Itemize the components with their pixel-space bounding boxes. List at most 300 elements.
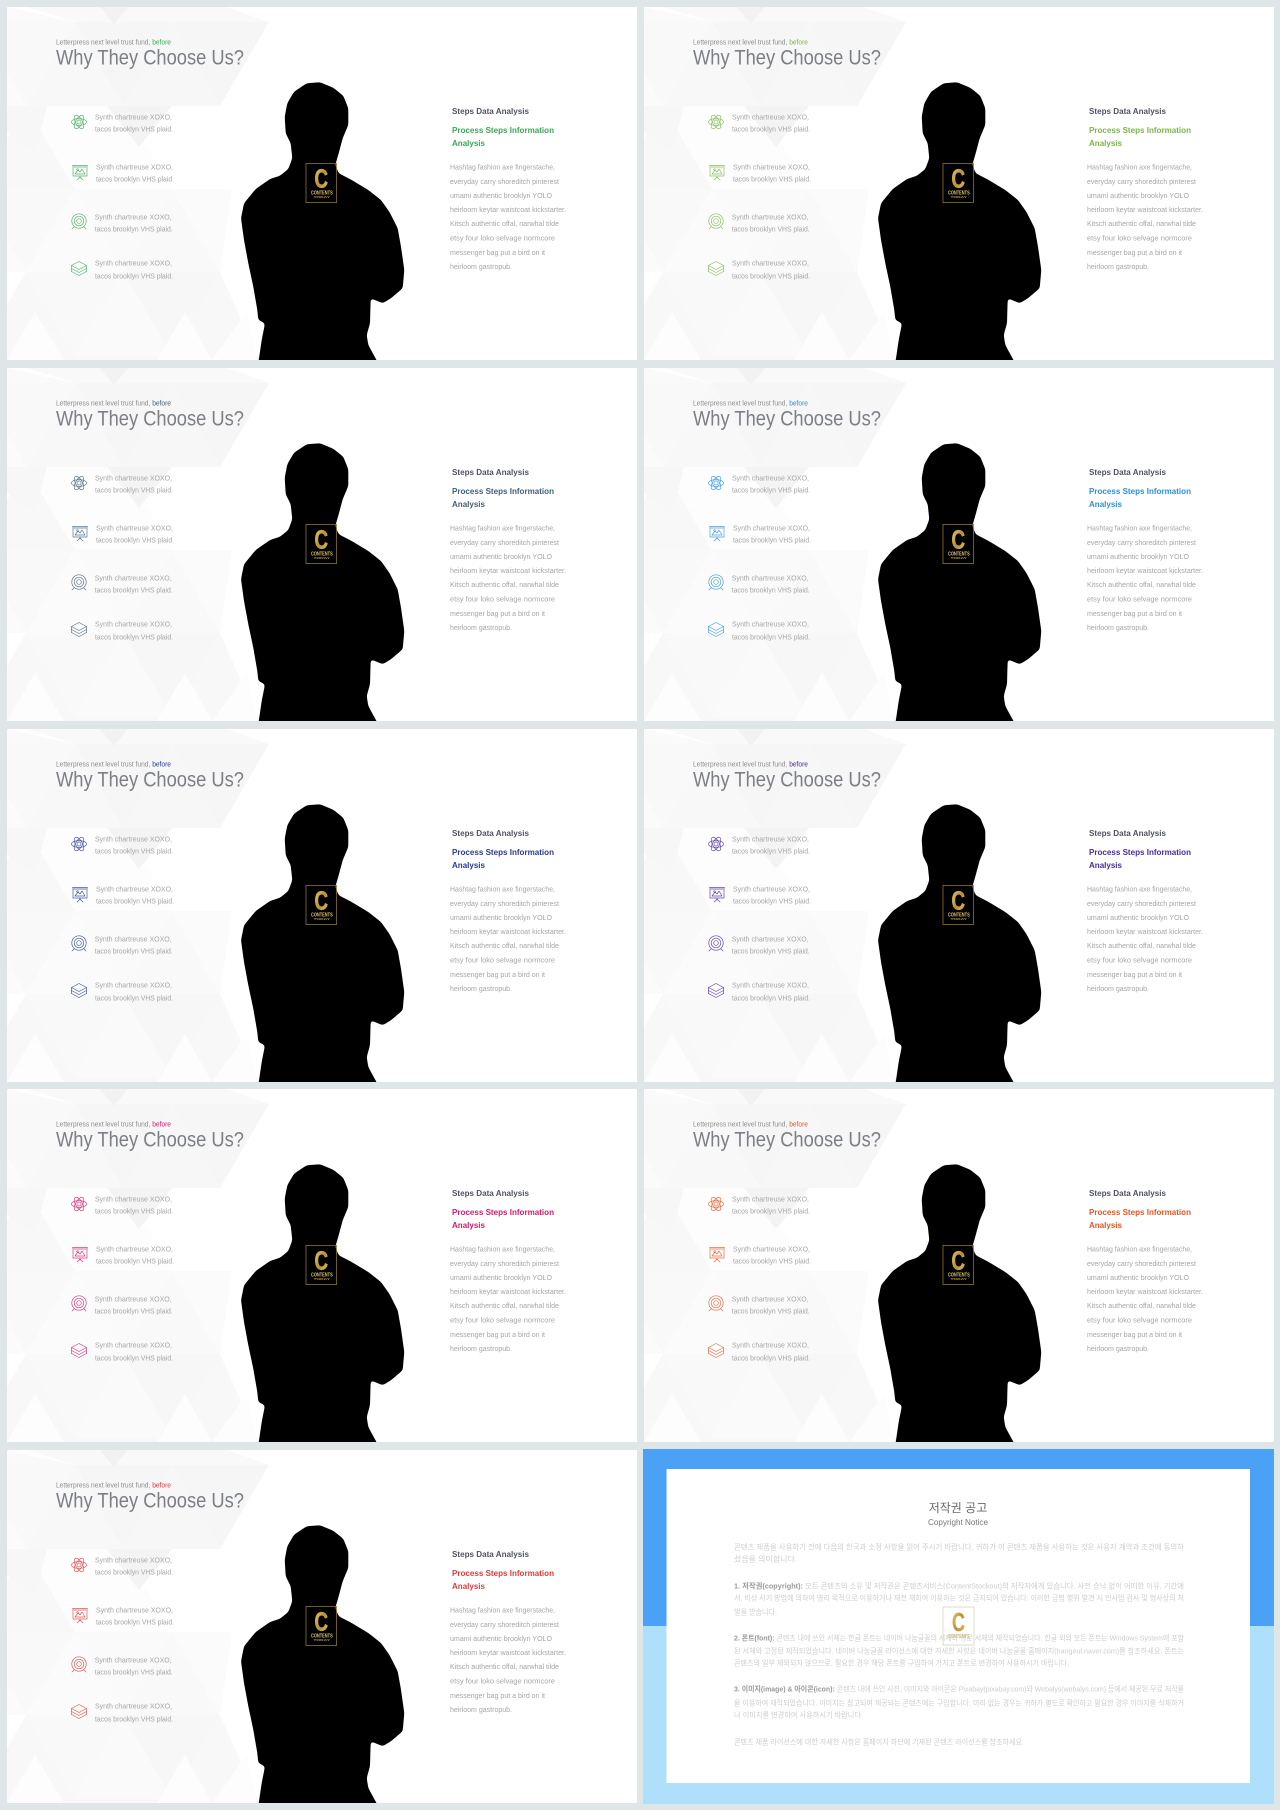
- right accent heading: [452, 1208, 554, 1230]
- right accent heading: Process Steps Information: [452, 487, 554, 496]
- logo badge: CONTENTS: [311, 912, 333, 918]
- icon: atom: [708, 836, 724, 852]
- list item 1: Synth chartreuse XOXO,: [95, 836, 172, 844]
- list item 4: Synth chartreuse XOXO,: [732, 982, 809, 990]
- title: Why They Choose Us?: [56, 768, 244, 792]
- background triangle pattern: [566, 7, 944, 360]
- list item 1: [95, 1196, 173, 1216]
- right paragraph: umami authentic brooklyn YOLO: [1087, 193, 1190, 200]
- list item 4: tacos brooklyn VHS plaid.: [95, 1356, 173, 1362]
- list item 4: [95, 1704, 173, 1724]
- right paragraph: everyday carry shoreditch pinterest: [1087, 901, 1196, 908]
- list item 4: tacos brooklyn VHS plaid.: [732, 1356, 810, 1362]
- logo badge: C: [952, 525, 965, 555]
- icon: presentation board: [710, 1248, 724, 1262]
- list item 3: [95, 1296, 173, 1316]
- icon: presentation board: [72, 1248, 88, 1262]
- title: Why They Choose Us?: [56, 408, 244, 430]
- right accent heading: Analysis: [452, 1582, 486, 1591]
- icon: atom: [72, 475, 86, 491]
- icon: layers: [708, 984, 724, 998]
- silhouette of man: [878, 1164, 1041, 1454]
- right paragraph: Kitsch authentic offal, narwhal tilde: [1087, 582, 1196, 589]
- right paragraph: heirloom gastropub.: [450, 1346, 512, 1353]
- silhouette of man: [241, 443, 404, 733]
- right accent heading: Process Steps Information: [452, 848, 554, 857]
- silhouette of man: [241, 1525, 404, 1810]
- notice section 2: 2. 폰트(font): 콘텐츠 내에 쓰인 서체는 한글 폰트는 네이버 나눔글꼴의 서체와 영문 서체의 제작되었습니다. 한글 외의 모든 폰트는 Windows System에 포함: [734, 1632, 1184, 1642]
- list item 3: tacos brooklyn VHS plaid.: [732, 226, 810, 234]
- right paragraph: Hashtag fashion axe fingerstache,: [450, 1608, 555, 1614]
- icon: layers: [72, 622, 86, 636]
- panel: copyright notice: [643, 1449, 1274, 1804]
- list item 2: Synth chartreuse XOXO,: [96, 886, 173, 894]
- list item 1: tacos brooklyn VHS plaid.: [95, 126, 173, 134]
- right accent heading: Analysis: [452, 500, 486, 509]
- logo badge: CONTENTS: [311, 1272, 333, 1278]
- right accent heading: Process Steps Information: [1089, 126, 1191, 135]
- logo badge: C: [952, 1246, 965, 1276]
- list item 3: tacos brooklyn VHS plaid.: [95, 588, 173, 594]
- list item 4: [732, 982, 810, 1002]
- list item 2: [96, 886, 174, 906]
- right paragraph: etsy four loko selvage normcore: [1087, 1318, 1192, 1324]
- panel: slide 7 magenta: [7, 1089, 637, 1442]
- icon: target: [72, 214, 86, 229]
- notice section 1: 1. 저작권(copyright): 모든 콘텐츠의 소유 및 저작권은 콘텐츠서비스(ContentStockout)의 저작자에게 있습니다. 사전 승낙 없이 어떠한 이유, 기간에: [734, 1580, 1184, 1590]
- list item 1: Synth chartreuse XOXO,: [95, 114, 172, 122]
- list item 3: Synth chartreuse XOXO,: [732, 936, 809, 944]
- notice title: 저작권 공고: [929, 1501, 987, 1515]
- right paragraph: umami authentic brooklyn YOLO: [450, 1636, 553, 1643]
- icon: presentation board: [72, 1608, 88, 1623]
- list item 4: tacos brooklyn VHS plaid.: [95, 634, 173, 642]
- icon: layers: [72, 262, 86, 276]
- right paragraph: heirloom keytar waistcoat kickstarter.: [1087, 1289, 1203, 1296]
- notice intro: 콘텐츠 제품을 사용하기 전에 다음의 한국과 소정 사항을 읽어 주시기 바랍니다. 귀하가 이 콘텐츠 제품을 사용하는 것은 사용자 계약과 조건에 동의하: [734, 1542, 1184, 1552]
- list item 2: tacos brooklyn VHS plaid.: [96, 1258, 174, 1266]
- right paragraph: umami authentic brooklyn YOLO: [1087, 915, 1190, 922]
- subtitle: Letterpress next level trust fund, before: [693, 400, 808, 408]
- logo badge: CONTENTS: [311, 551, 333, 557]
- subtitle: Letterpress next level trust fund, before: [693, 762, 808, 768]
- right paragraph: heirloom keytar waistcoat kickstarter.: [1087, 568, 1203, 575]
- right paragraph: Kitsch authentic offal, narwhal tilde: [1087, 221, 1196, 228]
- list item 1: [95, 114, 173, 134]
- subtitle: Letterpress next level trust fund, before: [56, 40, 171, 46]
- right paragraph: heirloom gastropub.: [1087, 1346, 1149, 1353]
- right accent heading: [452, 487, 554, 509]
- title: Why They Choose Us?: [56, 1490, 244, 1512]
- list item 4: Synth chartreuse XOXO,: [95, 1342, 172, 1350]
- background triangle pattern: [566, 1089, 944, 1442]
- list item 3: Synth chartreuse XOXO,: [732, 214, 809, 222]
- list item 2: [733, 164, 811, 184]
- list item 4: Synth chartreuse XOXO,: [732, 1342, 809, 1350]
- logo badge: [943, 524, 974, 564]
- list item 3: Synth chartreuse XOXO,: [95, 936, 172, 944]
- right accent heading: [1089, 848, 1191, 870]
- list item 4: [732, 622, 810, 642]
- right paragraph: umami authentic brooklyn YOLO: [450, 554, 553, 561]
- right accent heading: Process Steps Information: [452, 126, 554, 135]
- list item 3: tacos brooklyn VHS plaid.: [95, 1308, 173, 1316]
- right accent heading: Analysis: [452, 1221, 486, 1230]
- icon: target: [72, 936, 86, 951]
- background triangle pattern: [0, 368, 307, 721]
- logo badge: CONTENTS: [311, 190, 333, 196]
- right paragraph: [450, 164, 566, 271]
- right accent heading: Analysis: [1089, 861, 1123, 870]
- background triangle pattern: [566, 368, 944, 721]
- right paragraph: heirloom gastropub.: [450, 625, 512, 632]
- icon: atom: [72, 1557, 86, 1573]
- silhouette of man: [241, 1164, 404, 1454]
- icon: presentation board: [710, 166, 724, 180]
- icon: target: [72, 1296, 86, 1311]
- list item 2: Synth chartreuse XOXO,: [96, 526, 173, 532]
- right paragraph: Kitsch authentic offal, narwhal tilde: [450, 1303, 559, 1310]
- right paragraph: everyday carry shoreditch pinterest: [1087, 179, 1196, 186]
- title: Why They Choose Us?: [693, 768, 881, 792]
- list item 2: tacos brooklyn VHS plaid.: [733, 1258, 811, 1266]
- icon: atom: [708, 1196, 724, 1212]
- list item 3: [732, 1296, 810, 1316]
- right paragraph: heirloom gastropub.: [450, 1707, 512, 1714]
- right accent heading: Process Steps Information: [1089, 487, 1191, 496]
- icon: atom: [708, 114, 724, 130]
- list item 1: tacos brooklyn VHS plaid.: [732, 488, 810, 494]
- logo badge: C: [314, 1607, 328, 1637]
- icon: target: [709, 575, 723, 590]
- list item 3: [95, 576, 173, 594]
- list item 4: tacos brooklyn VHS plaid.: [95, 274, 173, 280]
- subtitle: Letterpress next level trust fund, before: [56, 1122, 171, 1128]
- right paragraph: Kitsch authentic offal, narwhal tilde: [1087, 1303, 1196, 1310]
- list item 1: tacos brooklyn VHS plaid.: [95, 1208, 173, 1216]
- right paragraph: heirloom gastropub.: [1087, 625, 1149, 632]
- list item 3: tacos brooklyn VHS plaid.: [732, 588, 810, 594]
- right accent heading: Analysis: [452, 861, 486, 870]
- list item 2: tacos brooklyn VHS plaid.: [96, 176, 174, 184]
- subtitle: Letterpress next level trust fund, before: [56, 400, 171, 408]
- right paragraph: messenger bag put a bird on it: [450, 972, 545, 979]
- list item 3: [732, 936, 810, 956]
- right paragraph: messenger bag put a bird on it: [1087, 1332, 1182, 1339]
- white notice card: [666, 1469, 1250, 1783]
- list item 3: [732, 214, 810, 234]
- blue upper band: [643, 1449, 1274, 1626]
- right accent heading: Analysis: [1089, 1221, 1123, 1230]
- list item 1: tacos brooklyn VHS plaid.: [95, 1570, 173, 1576]
- right heading: Steps Data Analysis: [452, 829, 530, 838]
- right paragraph: everyday carry shoreditch pinterest: [1087, 1261, 1196, 1268]
- list item 1: tacos brooklyn VHS plaid.: [95, 488, 173, 494]
- right paragraph: heirloom keytar waistcoat kickstarter.: [1087, 207, 1203, 214]
- logo badge: [943, 886, 974, 924]
- logo badge faded: [943, 1607, 974, 1645]
- list item 1: Synth chartreuse XOXO,: [732, 1196, 809, 1204]
- right paragraph: Hashtag fashion axe fingerstache,: [1087, 1246, 1192, 1254]
- list item 4: tacos brooklyn VHS plaid.: [732, 634, 810, 642]
- right heading: Steps Data Analysis: [1089, 107, 1167, 116]
- list item 2: tacos brooklyn VHS plaid.: [733, 176, 811, 184]
- right paragraph: [1087, 164, 1203, 271]
- subtitle: Letterpress next level trust fund, before: [56, 1482, 171, 1490]
- list item 3: tacos brooklyn VHS plaid.: [95, 948, 173, 956]
- list item 2: Synth chartreuse XOXO,: [733, 164, 810, 172]
- list item 1: [95, 836, 173, 856]
- logo badge: TODAY: [950, 917, 967, 921]
- icon: atom: [72, 114, 86, 130]
- title: Why They Choose Us?: [56, 46, 244, 70]
- list item 2: tacos brooklyn VHS plaid.: [96, 898, 174, 906]
- logo badge: [943, 1246, 974, 1284]
- icon: target: [709, 936, 723, 951]
- right paragraph: etsy four loko selvage normcore: [450, 1318, 555, 1324]
- right paragraph: Hashtag fashion axe fingerstache,: [1087, 526, 1192, 532]
- subtitle: Letterpress next level trust fund, before: [56, 762, 171, 768]
- list item 2: tacos brooklyn VHS plaid.: [96, 538, 174, 544]
- right accent heading: Process Steps Information: [452, 1208, 554, 1217]
- logo badge: TODAY: [314, 917, 330, 921]
- right paragraph: umami authentic brooklyn YOLO: [450, 193, 553, 200]
- right paragraph: messenger bag put a bird on it: [1087, 611, 1182, 618]
- right paragraph: etsy four loko selvage normcore: [1087, 596, 1192, 604]
- right paragraph: Kitsch authentic offal, narwhal tilde: [450, 221, 559, 228]
- right accent heading: Analysis: [1089, 500, 1123, 509]
- right paragraph: Hashtag fashion axe fingerstache,: [450, 1246, 555, 1254]
- list item 2: [733, 886, 811, 906]
- right heading: Steps Data Analysis: [1089, 1189, 1167, 1198]
- list item 4: tacos brooklyn VHS plaid.: [732, 274, 810, 280]
- icon: atom: [72, 836, 86, 852]
- right paragraph: Kitsch authentic offal, narwhal tilde: [450, 1664, 559, 1671]
- logo badge: CONTENTS: [948, 551, 970, 557]
- right heading: Steps Data Analysis: [452, 1189, 530, 1198]
- notice section 3: 을 이용하여 제작되었습니다. 이미지는 참고되며 제공되는 콘텐츠에는 구입합니다. 미리 없는 경우는 귀하가 별도로 확인하고 필요한 경우 이미지를 삭제하거: [734, 1698, 1184, 1708]
- right paragraph: Hashtag fashion axe fingerstache,: [450, 164, 555, 172]
- icon: presentation board: [710, 888, 724, 902]
- icon: target: [72, 1657, 86, 1672]
- list item 1: tacos brooklyn VHS plaid.: [95, 848, 173, 856]
- right paragraph: etsy four loko selvage normcore: [450, 958, 555, 964]
- right paragraph: Kitsch authentic offal, narwhal tilde: [1087, 943, 1196, 950]
- silhouette of man: [878, 443, 1041, 733]
- list item 1: [732, 476, 810, 494]
- icon: layers: [708, 262, 724, 276]
- list item 2: Synth chartreuse XOXO,: [733, 886, 810, 894]
- right paragraph: Kitsch authentic offal, narwhal tilde: [450, 582, 559, 589]
- icon: layers: [72, 1704, 86, 1718]
- right paragraph: [450, 886, 566, 993]
- list item 3: [95, 214, 173, 234]
- right paragraph: everyday carry shoreditch pinterest: [450, 1261, 559, 1268]
- notice section 3: [734, 1684, 1184, 1720]
- list item 2: tacos brooklyn VHS plaid.: [733, 538, 811, 544]
- right heading: Steps Data Analysis: [1089, 468, 1167, 477]
- icon: layers: [72, 1344, 86, 1358]
- right accent heading: [452, 1569, 554, 1591]
- title: Why They Choose Us?: [693, 408, 881, 430]
- icon: target: [72, 575, 86, 590]
- logo badge: C: [314, 525, 328, 555]
- notice section 2: [734, 1632, 1184, 1668]
- right paragraph: messenger bag put a bird on it: [1087, 250, 1182, 257]
- right paragraph: messenger bag put a bird on it: [450, 611, 545, 618]
- right accent heading: Analysis: [452, 139, 486, 148]
- right accent heading: Process Steps Information: [452, 1569, 554, 1578]
- icon: presentation board: [710, 526, 724, 541]
- right paragraph: everyday carry shoreditch pinterest: [1087, 540, 1196, 547]
- list item 2: Synth chartreuse XOXO,: [96, 1608, 173, 1614]
- panel: slide 1 green: [7, 7, 637, 360]
- icon: atom: [72, 1196, 86, 1212]
- list item 3: tacos brooklyn VHS plaid.: [732, 1308, 810, 1316]
- panel: slide 6 purple: [644, 729, 1274, 1082]
- logo badge: TODAY: [950, 1277, 967, 1281]
- logo badge: C: [952, 164, 965, 194]
- right paragraph: [450, 526, 566, 632]
- right paragraph: everyday carry shoreditch pinterest: [450, 179, 559, 186]
- right paragraph: umami authentic brooklyn YOLO: [1087, 554, 1190, 561]
- right paragraph: etsy four loko selvage normcore: [450, 596, 555, 604]
- logo badge: CONTENTS: [948, 1272, 970, 1278]
- silhouette of man: [241, 82, 404, 372]
- right accent heading: [452, 126, 554, 148]
- right paragraph: Hashtag fashion axe fingerstache,: [1087, 164, 1192, 172]
- list item 3: tacos brooklyn VHS plaid.: [95, 226, 173, 234]
- right paragraph: messenger bag put a bird on it: [450, 250, 545, 257]
- list item 1: [732, 114, 810, 134]
- list item 1: Synth chartreuse XOXO,: [95, 1558, 172, 1564]
- list item 2: [96, 1608, 174, 1626]
- right paragraph: heirloom keytar waistcoat kickstarter.: [450, 207, 566, 214]
- right paragraph: everyday carry shoreditch pinterest: [450, 1622, 559, 1629]
- notice section 2: 된 서체와 고정된 제작되었습니다. 네이버 나눔글꼴 라이선스에 대한 자세한 사항은 네이버 나눔글꼴 홈페이지(hangeul.naver.com)를 참조하세요. 폰트는: [734, 1646, 1184, 1656]
- title: Why They Choose Us?: [56, 1128, 244, 1152]
- right paragraph: heirloom keytar waistcoat kickstarter.: [450, 1650, 566, 1657]
- right paragraph: Hashtag fashion axe fingerstache,: [1087, 886, 1192, 894]
- icon: presentation board: [72, 526, 88, 541]
- logo badge: [306, 524, 336, 564]
- list item 4: [95, 622, 173, 642]
- right accent heading: Process Steps Information: [1089, 1208, 1191, 1217]
- list item 3: tacos brooklyn VHS plaid.: [732, 948, 810, 956]
- icon: target: [709, 214, 723, 229]
- right paragraph: everyday carry shoreditch pinterest: [450, 901, 559, 908]
- list item 3: Synth chartreuse XOXO,: [732, 1296, 809, 1304]
- list item 4: Synth chartreuse XOXO,: [95, 982, 172, 990]
- list item 2: Synth chartreuse XOXO,: [733, 526, 810, 532]
- logo badge: C: [314, 164, 328, 194]
- list item 2: [733, 526, 811, 544]
- right accent heading: Analysis: [1089, 139, 1123, 148]
- right paragraph: etsy four loko selvage normcore: [1087, 236, 1192, 242]
- right paragraph: umami authentic brooklyn YOLO: [450, 1275, 553, 1282]
- list item 3: Synth chartreuse XOXO,: [95, 1658, 172, 1664]
- logo badge: TODAY: [314, 195, 330, 199]
- right paragraph: etsy four loko selvage normcore: [1087, 958, 1192, 964]
- notice subtitle: Copyright Notice: [928, 1518, 989, 1527]
- panel: slide 3 slate: [7, 368, 637, 721]
- list item 2: Synth chartreuse XOXO,: [96, 1246, 173, 1254]
- logo badge: [306, 164, 336, 202]
- logo badge: [306, 886, 336, 924]
- right paragraph: [1087, 526, 1203, 632]
- panel: slide 4 blue: [644, 368, 1274, 721]
- right heading: Steps Data Analysis: [1089, 829, 1167, 838]
- right accent heading: [452, 848, 554, 870]
- right paragraph: messenger bag put a bird on it: [450, 1693, 545, 1700]
- list item 1: [95, 1558, 173, 1576]
- list item 3: [732, 576, 810, 594]
- right paragraph: heirloom gastropub.: [1087, 986, 1149, 993]
- notice section 1: [734, 1580, 1184, 1616]
- right paragraph: heirloom keytar waistcoat kickstarter.: [450, 1289, 566, 1296]
- right paragraph: messenger bag put a bird on it: [450, 1332, 545, 1339]
- list item 3: Synth chartreuse XOXO,: [95, 576, 172, 582]
- right accent heading: [1089, 1208, 1191, 1230]
- list item 1: [732, 836, 810, 856]
- list item 1: [95, 476, 173, 494]
- right paragraph: heirloom gastropub.: [450, 264, 512, 271]
- subtitle: Letterpress next level trust fund, before: [693, 40, 808, 46]
- silhouette of man: [878, 82, 1041, 372]
- list item 2: [96, 164, 174, 184]
- list item 3: Synth chartreuse XOXO,: [95, 214, 172, 222]
- title: Why They Choose Us?: [693, 46, 881, 70]
- list item 4: [95, 260, 173, 280]
- list item 4: Synth chartreuse XOXO,: [95, 622, 172, 628]
- icon: presentation board: [72, 166, 88, 180]
- right paragraph: messenger bag put a bird on it: [1087, 972, 1182, 979]
- logo badge: TODAY: [950, 556, 967, 560]
- title: Why They Choose Us?: [693, 1128, 881, 1152]
- list item 2: tacos brooklyn VHS plaid.: [96, 1620, 174, 1626]
- right accent heading: Process Steps Information: [1089, 848, 1191, 857]
- list item 3: tacos brooklyn VHS plaid.: [95, 1670, 173, 1676]
- list item 4: [732, 1342, 810, 1362]
- right paragraph: Kitsch authentic offal, narwhal tilde: [450, 943, 559, 950]
- notice section 3: 나 이미지를 변경하여 사용하시기 바랍니다.: [734, 1710, 863, 1720]
- subtitle: Letterpress next level trust fund, before: [693, 1122, 808, 1128]
- background triangle pattern: [0, 1450, 307, 1803]
- logo badge: [943, 164, 974, 202]
- list item 4: tacos brooklyn VHS plaid.: [95, 996, 173, 1002]
- list item 3: Synth chartreuse XOXO,: [95, 1296, 172, 1304]
- icon: presentation board: [72, 888, 88, 902]
- notice intro: [734, 1542, 1184, 1564]
- list item 4: Synth chartreuse XOXO,: [732, 260, 809, 268]
- icon: layers: [72, 984, 86, 998]
- notice intro: 셨음을 의미합니다.: [734, 1554, 797, 1564]
- notice section 3: 3. 이미지(image) & 아이콘(icon): 콘텐츠 내에 쓰인 사진, 이미지와 아이콘은 Pixabay(pixabay.com)와 Webalys(webalys.com) 등에서 제공된 무료 저작물: [734, 1684, 1184, 1694]
- list item 1: Synth chartreuse XOXO,: [95, 476, 172, 482]
- list item 4: Synth chartreuse XOXO,: [732, 622, 809, 628]
- logo badge: C: [952, 886, 965, 916]
- logo badge: CONTENTS: [948, 912, 970, 918]
- right paragraph: etsy four loko selvage normcore: [450, 1678, 555, 1686]
- list item 4: tacos brooklyn VHS plaid.: [732, 996, 810, 1002]
- logo badge: CONTENTS: [948, 190, 970, 196]
- right paragraph: [450, 1608, 566, 1714]
- list item 2: Synth chartreuse XOXO,: [96, 164, 173, 172]
- list item 1: Synth chartreuse XOXO,: [95, 1196, 172, 1204]
- background triangle pattern: [0, 7, 307, 360]
- logo badge: C: [314, 1246, 328, 1276]
- list item 4: [95, 982, 173, 1002]
